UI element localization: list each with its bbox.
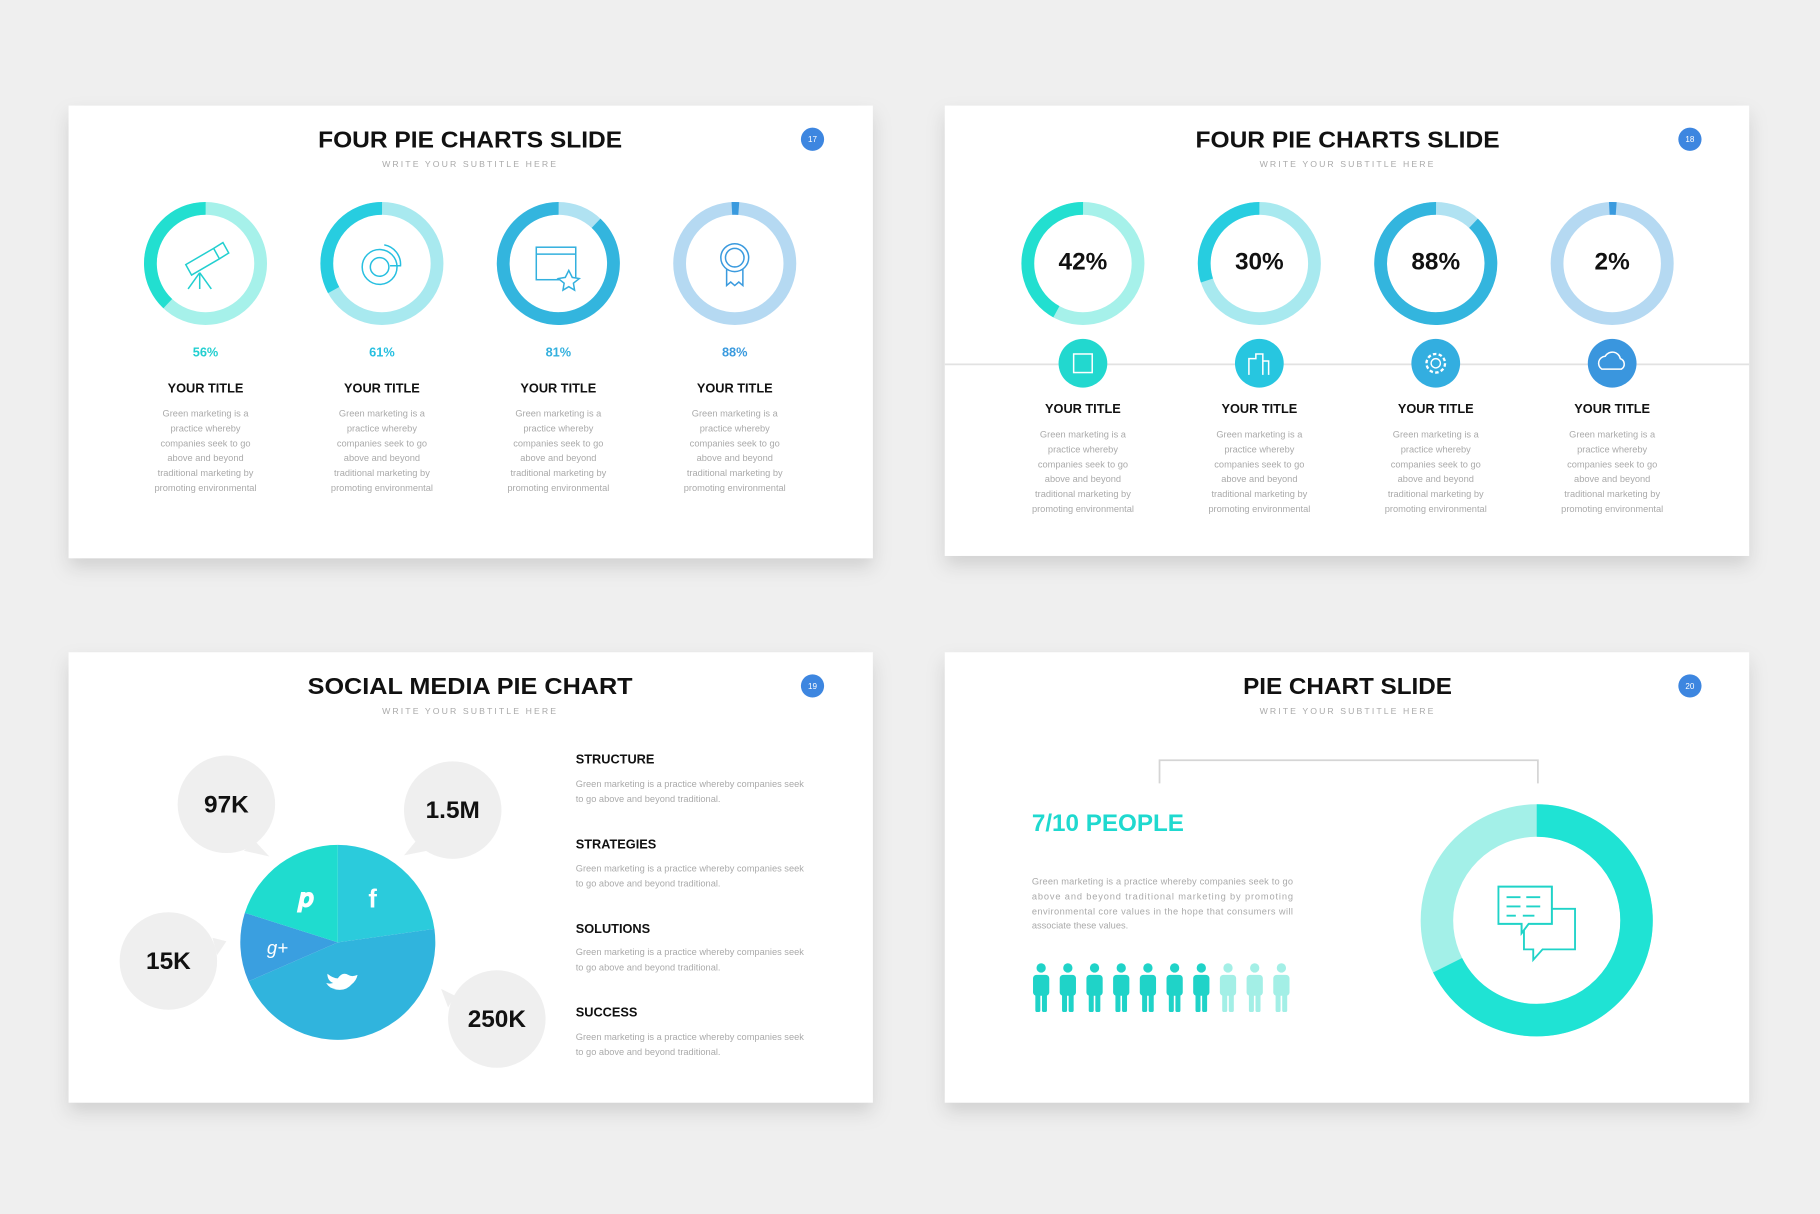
donut 61%: YOUR TITLE: [344, 380, 420, 395]
list items: to go above and beyond traditional.: [576, 962, 721, 972]
title: FOUR PIE CHARTS SLIDE: [318, 126, 622, 152]
donut 61%: [307, 189, 457, 493]
list items: Green marketing is a practice whereby companies seek: [576, 864, 804, 874]
list items: SOLUTIONS: [576, 921, 650, 936]
panel: four pie charts slide 18: WRITE YOUR SUBTITLE HERE: [1260, 159, 1436, 169]
panel: four pie charts slide 18: [945, 106, 1749, 556]
donut 88%: 88%: [722, 344, 748, 359]
subtitle: WRITE YOUR SUBTITLE HERE: [382, 159, 558, 169]
panel: four pie charts slide 17: [69, 106, 873, 558]
body text: [1032, 876, 1293, 930]
donut 56%: YOUR TITLE: [168, 380, 243, 395]
heading 7/10 people: 7/10 PEOPLE: [1032, 810, 1184, 837]
list items: Green marketing is a practice whereby companies seek: [576, 1032, 804, 1042]
bubble 1.5M: [404, 761, 501, 859]
panel: pie chart slide: PIE CHART SLIDE: [1243, 673, 1452, 699]
list items: Green marketing is a practice whereby companies seek: [576, 947, 804, 957]
donut 56%: [128, 186, 283, 493]
list items: to go above and beyond traditional.: [576, 1047, 721, 1057]
panel: pie chart slide: WRITE YOUR SUBTITLE HERE: [1260, 706, 1436, 716]
donut 88%: [1358, 186, 1514, 514]
bubble 250K: [441, 970, 546, 1068]
donut chart 7/10: [1437, 821, 1637, 1020]
donut 42%: 42%: [1059, 248, 1108, 275]
donut 30%: [1190, 194, 1329, 514]
panel: four pie charts slide 18: 18: [1685, 135, 1695, 144]
badge 17: 17: [808, 135, 818, 144]
body text: Green marketing is a practice whereby companies seek to go: [1032, 876, 1293, 886]
list items: SUCCESS: [576, 1005, 637, 1020]
donut 42%: [1008, 189, 1158, 514]
list items: STRATEGIES: [576, 836, 656, 851]
donut 81%: [480, 186, 636, 493]
donut 2%: [1554, 206, 1670, 514]
donut 81%: 81%: [546, 344, 571, 359]
donut 30%: 30%: [1235, 248, 1284, 275]
bubble 1.5M: 1.5M: [426, 797, 480, 824]
panel: social media pie chart: [69, 652, 873, 1103]
pie chart: 𝒑: [296, 884, 314, 913]
body text: above and beyond traditional marketing by promoting: [1032, 891, 1293, 901]
donut 81%: YOUR TITLE: [520, 380, 596, 395]
list items: [576, 752, 804, 1057]
donut 2%: 2%: [1595, 248, 1630, 275]
donut 88%: YOUR TITLE: [1398, 401, 1474, 416]
panel: pie chart slide: 20: [1685, 682, 1695, 691]
panel: four pie charts slide 18: FOUR PIE CHARTS SLIDE: [1196, 126, 1500, 152]
bubble 15K: [120, 912, 226, 1010]
donut 88%: [677, 206, 793, 493]
bubble 15K: 15K: [146, 948, 191, 975]
donut 56%: 56%: [193, 344, 218, 359]
panel: social media pie chart: WRITE YOUR SUBTITLE HERE: [382, 706, 558, 716]
bubble 250K: 250K: [468, 1006, 526, 1033]
donut 61%: 61%: [369, 344, 395, 359]
bubble 97K: [178, 756, 275, 857]
list items: to go above and beyond traditional.: [576, 794, 721, 804]
pie chart: f: [368, 886, 377, 914]
panel: pie chart slide: [945, 652, 1749, 1103]
list items: Green marketing is a practice whereby companies seek: [576, 779, 804, 789]
donut 30%: YOUR TITLE: [1221, 401, 1297, 416]
pie chart: g+: [267, 937, 288, 958]
people icons: [1033, 963, 1290, 1012]
body text: associate these values.: [1032, 920, 1128, 930]
pie chart: [240, 845, 435, 1040]
bubble 97K: 97K: [204, 791, 249, 818]
body text: environmental core values in the hope that consumers will: [1032, 907, 1293, 917]
donut 88%: 88%: [1411, 248, 1460, 275]
donut 42%: YOUR TITLE: [1045, 401, 1121, 416]
donut 2%: YOUR TITLE: [1574, 401, 1650, 416]
panel: social media pie chart: SOCIAL MEDIA PIE CHART: [308, 673, 633, 699]
panel: social media pie chart: 19: [808, 682, 818, 691]
badge 17: [801, 128, 824, 151]
list items: STRUCTURE: [576, 752, 654, 767]
donut 88%: YOUR TITLE: [697, 380, 773, 395]
list items: to go above and beyond traditional.: [576, 879, 721, 889]
